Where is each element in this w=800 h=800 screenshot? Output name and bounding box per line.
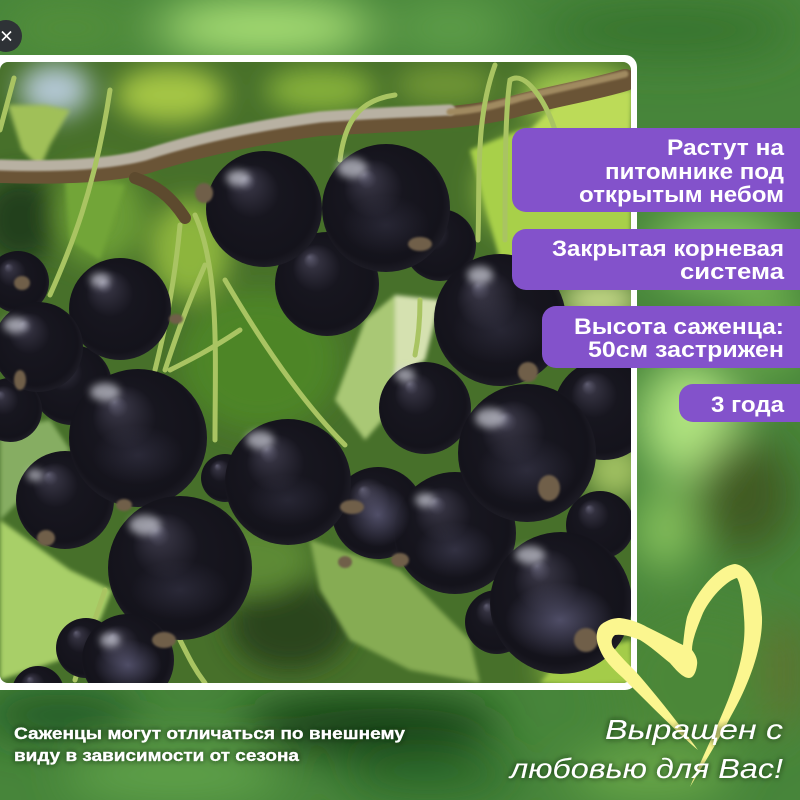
badge: seedling height [542, 306, 800, 368]
badge: seedling height: 50см застрижен [588, 337, 784, 362]
badge: grown in open field: открытым небом [579, 182, 784, 207]
slogan: Выращен с [605, 714, 783, 745]
berries cluster [0, 144, 654, 718]
badge: age [679, 384, 800, 422]
badge: seedling height: Высота саженца: [574, 314, 784, 339]
slogan [508, 714, 783, 784]
leaves [0, 90, 631, 683]
badge: closed root system: система [680, 259, 785, 284]
slogan: любовью для Вас! [508, 753, 783, 784]
badge: grown in open field: Растут на [667, 135, 785, 160]
disclaimer text: виду в зависимости от сезона [14, 746, 300, 765]
berry stems [0, 65, 555, 683]
badge: closed root system: Закрытая корневая [552, 236, 784, 261]
close button icon [0, 20, 22, 52]
berry reflections [92, 195, 615, 691]
disclaimer text: Саженцы могут отличаться по внешнему [14, 724, 406, 743]
branch [0, 74, 625, 218]
photo panel: black currant branch [0, 55, 654, 718]
white photo frame [0, 55, 637, 690]
badge: closed root system [512, 229, 800, 290]
disclaimer text [14, 724, 406, 765]
icon: hand-drawn yellow heart [597, 564, 762, 787]
berry highlights [3, 158, 545, 647]
badge: grown in open field: питомнике под [605, 159, 784, 184]
badge: age: 3 года [711, 392, 785, 417]
badge: grown in open field [512, 128, 800, 212]
berry calyx tips [14, 183, 598, 652]
